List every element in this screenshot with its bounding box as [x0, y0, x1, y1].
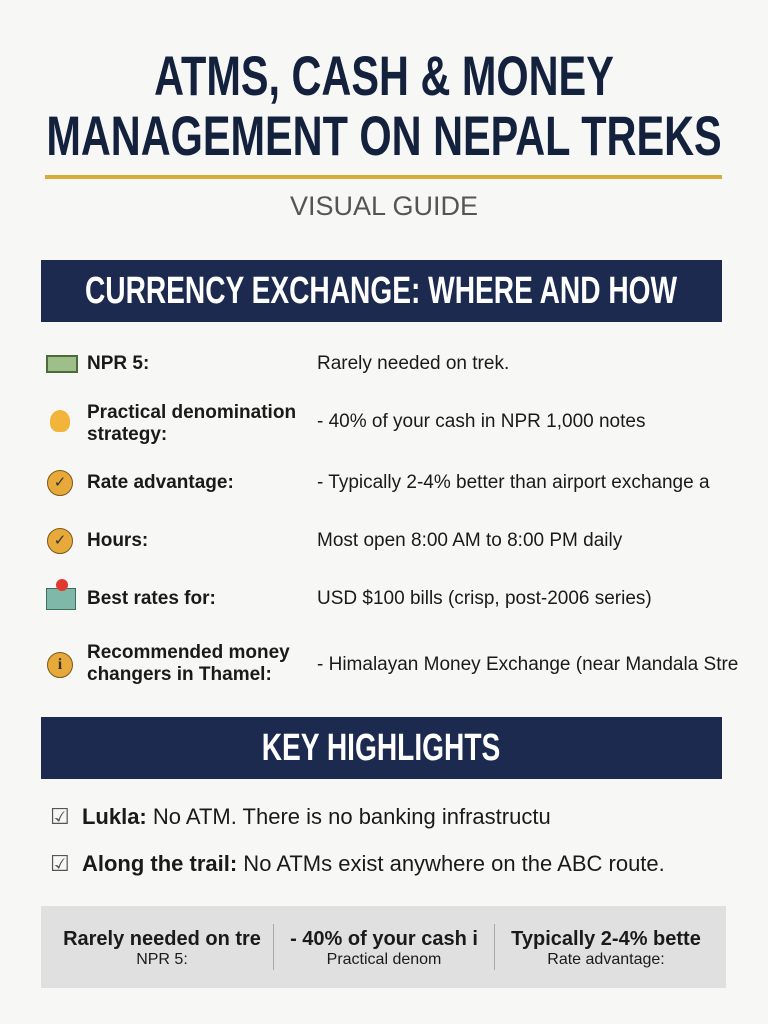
banner: currency exchange	[41, 260, 722, 322]
icon: check	[47, 528, 73, 554]
banner: key highlights: KEY HIGHLIGHTS	[262, 727, 500, 769]
row: hours: Hours:	[87, 530, 148, 551]
icon: banknote	[46, 355, 78, 373]
title: MANAGEMENT ON NEPAL TREKS	[46, 104, 722, 167]
icon: map pin	[46, 588, 76, 610]
icon: check: ✓	[54, 532, 66, 549]
stat 3: Rate advantage:	[547, 951, 665, 968]
highlight: Lukla: ☑ Lukla: No ATM. There is no banking infrastructu	[50, 804, 551, 829]
icon: check: ✓	[54, 474, 66, 491]
panel: summary stats	[41, 906, 726, 988]
icon: check	[47, 470, 73, 496]
stat 3: Typically 2-4% bette	[511, 928, 701, 950]
highlight: trail: ☑ Along the trail: No ATMs exist anywhere on the ABC route.	[50, 851, 665, 876]
title: ATMS, CASH & MONEY	[154, 44, 614, 107]
panel: exchange rows: - Himalayan Money Exchange (near Mandala Stre	[317, 654, 738, 675]
row: NPR 5: NPR 5:	[87, 353, 149, 374]
stat 3	[511, 928, 701, 968]
row: rate advantage: Rate advantage:	[87, 472, 234, 493]
panel: exchange rows: - 40% of your cash in NPR 1,000 notes	[317, 411, 645, 432]
gold divider	[45, 175, 722, 179]
row: denomination	[87, 402, 296, 445]
icon: lightbulb	[50, 410, 70, 432]
stat 2: - 40% of your cash i	[290, 928, 478, 950]
panel: exchange rows: Rarely needed on trek.	[317, 353, 509, 374]
row: money changers: changers in Thamel:	[87, 664, 272, 685]
panel: exchange rows: USD $100 bills (crisp, post-2006 series)	[317, 588, 652, 609]
stat 2	[290, 928, 478, 968]
row: money changers	[87, 642, 290, 685]
stat 1: Rarely needed on tre	[63, 928, 261, 950]
panel: exchange rows: - Typically 2-4% better than airport exchange a	[317, 472, 710, 493]
banner: currency exchange: CURRENCY EXCHANGE: WHERE AND HOW	[85, 270, 677, 312]
stat 1: NPR 5:	[136, 951, 188, 968]
icon: info	[47, 652, 73, 678]
row: denomination: Practical denomination	[87, 402, 296, 423]
row: money changers: Recommended money	[87, 642, 290, 663]
row: denomination: strategy:	[87, 424, 167, 445]
stat 2: Practical denom	[327, 951, 441, 968]
banner: key highlights	[41, 717, 722, 779]
title	[46, 44, 722, 167]
panel: exchange rows	[46, 353, 738, 685]
row: best rates: Best rates for:	[87, 588, 216, 609]
icon: info: i	[58, 656, 62, 673]
stat 1	[63, 928, 261, 968]
panel: exchange rows: Most open 8:00 AM to 8:00 PM daily	[317, 530, 622, 551]
subtitle: VISUAL GUIDE	[290, 191, 478, 221]
